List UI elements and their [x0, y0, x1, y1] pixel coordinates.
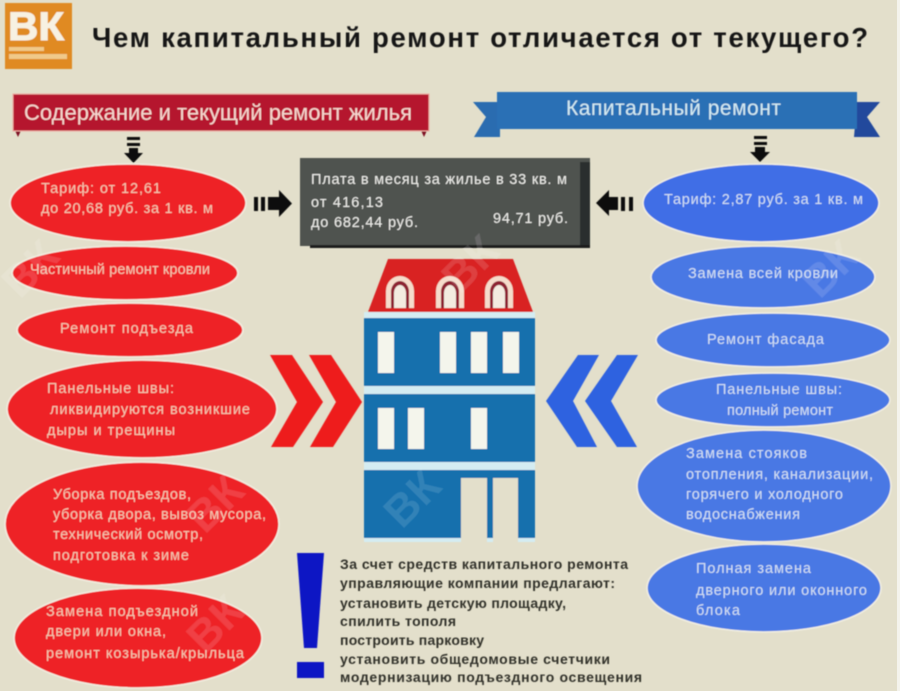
- watermarks: ВК: [374, 461, 451, 537]
- panel: monthly cost: Плата в месяц за жилье в 33 кв. м: [311, 172, 567, 188]
- arrows: blue chevrons: [546, 355, 638, 447]
- panel: panel seams left: дыры и трещины: [47, 423, 175, 439]
- icon: exclamation mark: [297, 553, 324, 678]
- arrow: left to cost box: [596, 190, 633, 216]
- panel: door replacement left: Замена подъездной: [46, 604, 198, 620]
- text block: capital repair note: [340, 556, 642, 685]
- panel: riser replacement: [637, 430, 891, 542]
- arrow: down right: [750, 136, 770, 162]
- panel: riser replacement: горячего и холодного: [686, 487, 843, 503]
- watermarks: ВК: [432, 226, 509, 302]
- title: Чем капитальный ремонт отличается от текущего?: [92, 22, 868, 53]
- banner: current repair: [13, 94, 429, 137]
- watermarks: ВК: [177, 466, 254, 542]
- arrow: right to cost box: [254, 190, 292, 217]
- panel: panel seams right: [656, 373, 890, 427]
- panel: panel seams left: [7, 360, 277, 458]
- panel: monthly cost: 94,71 руб.: [493, 211, 568, 227]
- panel: cleaning: Уборка подъездов,: [53, 487, 191, 503]
- panel: door replacement right: Полная замена: [696, 561, 812, 577]
- panel: panel seams right: полный ремонт: [727, 403, 833, 419]
- panel: cleaning: подготовка к зиме: [53, 548, 189, 564]
- panel: entrance repair: [17, 303, 243, 357]
- icon: building: [364, 259, 535, 542]
- panel: partial roof repair: [12, 246, 238, 300]
- arrows: red chevrons: [270, 355, 362, 447]
- panel: riser replacement: Замена стояков: [686, 446, 807, 462]
- panel: monthly cost: от 416,13: [311, 195, 383, 211]
- text block: capital repair note: За счет средств капитального ремонта: [340, 556, 628, 572]
- panel: partial roof repair: Частичный ремонт кровли: [30, 262, 210, 278]
- panel: panel seams right: Панельные швы:: [716, 382, 842, 398]
- text block: capital repair note: управляющие компании предлагают:: [340, 575, 615, 591]
- banner: current repair: Содержание и текущий ремонт жилья: [24, 100, 412, 125]
- panel: cleaning: технический осмотр,: [53, 527, 203, 543]
- panel: cleaning: [5, 462, 279, 586]
- panel: facade repair: Ремонт фасада: [707, 332, 825, 348]
- panel: door replacement right: дверного или оконного: [696, 583, 867, 599]
- text block: capital repair note: установить общедомовые счетчики: [340, 651, 610, 667]
- panel: full roof replacement: Замена всей кровли: [688, 266, 838, 282]
- panel: door replacement left: двери или окна,: [46, 624, 166, 640]
- banner: capital repair: Капитальный ремонт: [566, 97, 781, 120]
- panel: monthly cost: [300, 158, 590, 248]
- panel: left tariff: [10, 164, 246, 242]
- panel: left tariff: до 20,68 руб. за 1 кв. м: [41, 201, 213, 217]
- panel: door replacement right: блока: [696, 603, 741, 619]
- panel: right tariff: Тариф: 2,87 руб. за 1 кв. м: [664, 192, 863, 208]
- panel: riser replacement: водоснабжения: [686, 507, 800, 523]
- watermarks: [0, 226, 869, 662]
- panel: panel seams left: ликвидируются возникшие: [50, 402, 250, 418]
- panel: full roof replacement: [651, 246, 875, 308]
- panel: door replacement left: [14, 588, 262, 688]
- text block: capital repair note: спилить тополя: [340, 613, 456, 629]
- panel: facade repair: [656, 313, 890, 367]
- panel: door replacement left: ремонт козырька/крыльца: [46, 646, 245, 662]
- watermarks: ВК: [177, 586, 254, 662]
- arrow: down left: [124, 137, 143, 163]
- panel: riser replacement: отопления, канализации,: [686, 467, 873, 483]
- panel: panel seams left: Панельные швы:: [47, 381, 174, 397]
- panel: monthly cost: до 682,44 руб.: [311, 215, 418, 231]
- logo: [5, 3, 72, 69]
- text block: capital repair note: установить детскую площадку,: [340, 595, 566, 611]
- panel: right tariff: [643, 164, 879, 242]
- logo: ВК: [8, 5, 65, 49]
- watermarks: ВК: [792, 231, 869, 307]
- text block: capital repair note: модернизацию подъездного освещения: [340, 669, 642, 685]
- banner: capital repair: [473, 92, 880, 137]
- text block: capital repair note: построить парковку: [340, 632, 484, 648]
- panel: left tariff: Тариф: от 12,61: [41, 181, 161, 197]
- panel: door replacement right: [647, 544, 881, 632]
- panel: cleaning: уборка двора, вывоз мусора,: [53, 507, 266, 523]
- panel: entrance repair: Ремонт подъезда: [60, 321, 194, 337]
